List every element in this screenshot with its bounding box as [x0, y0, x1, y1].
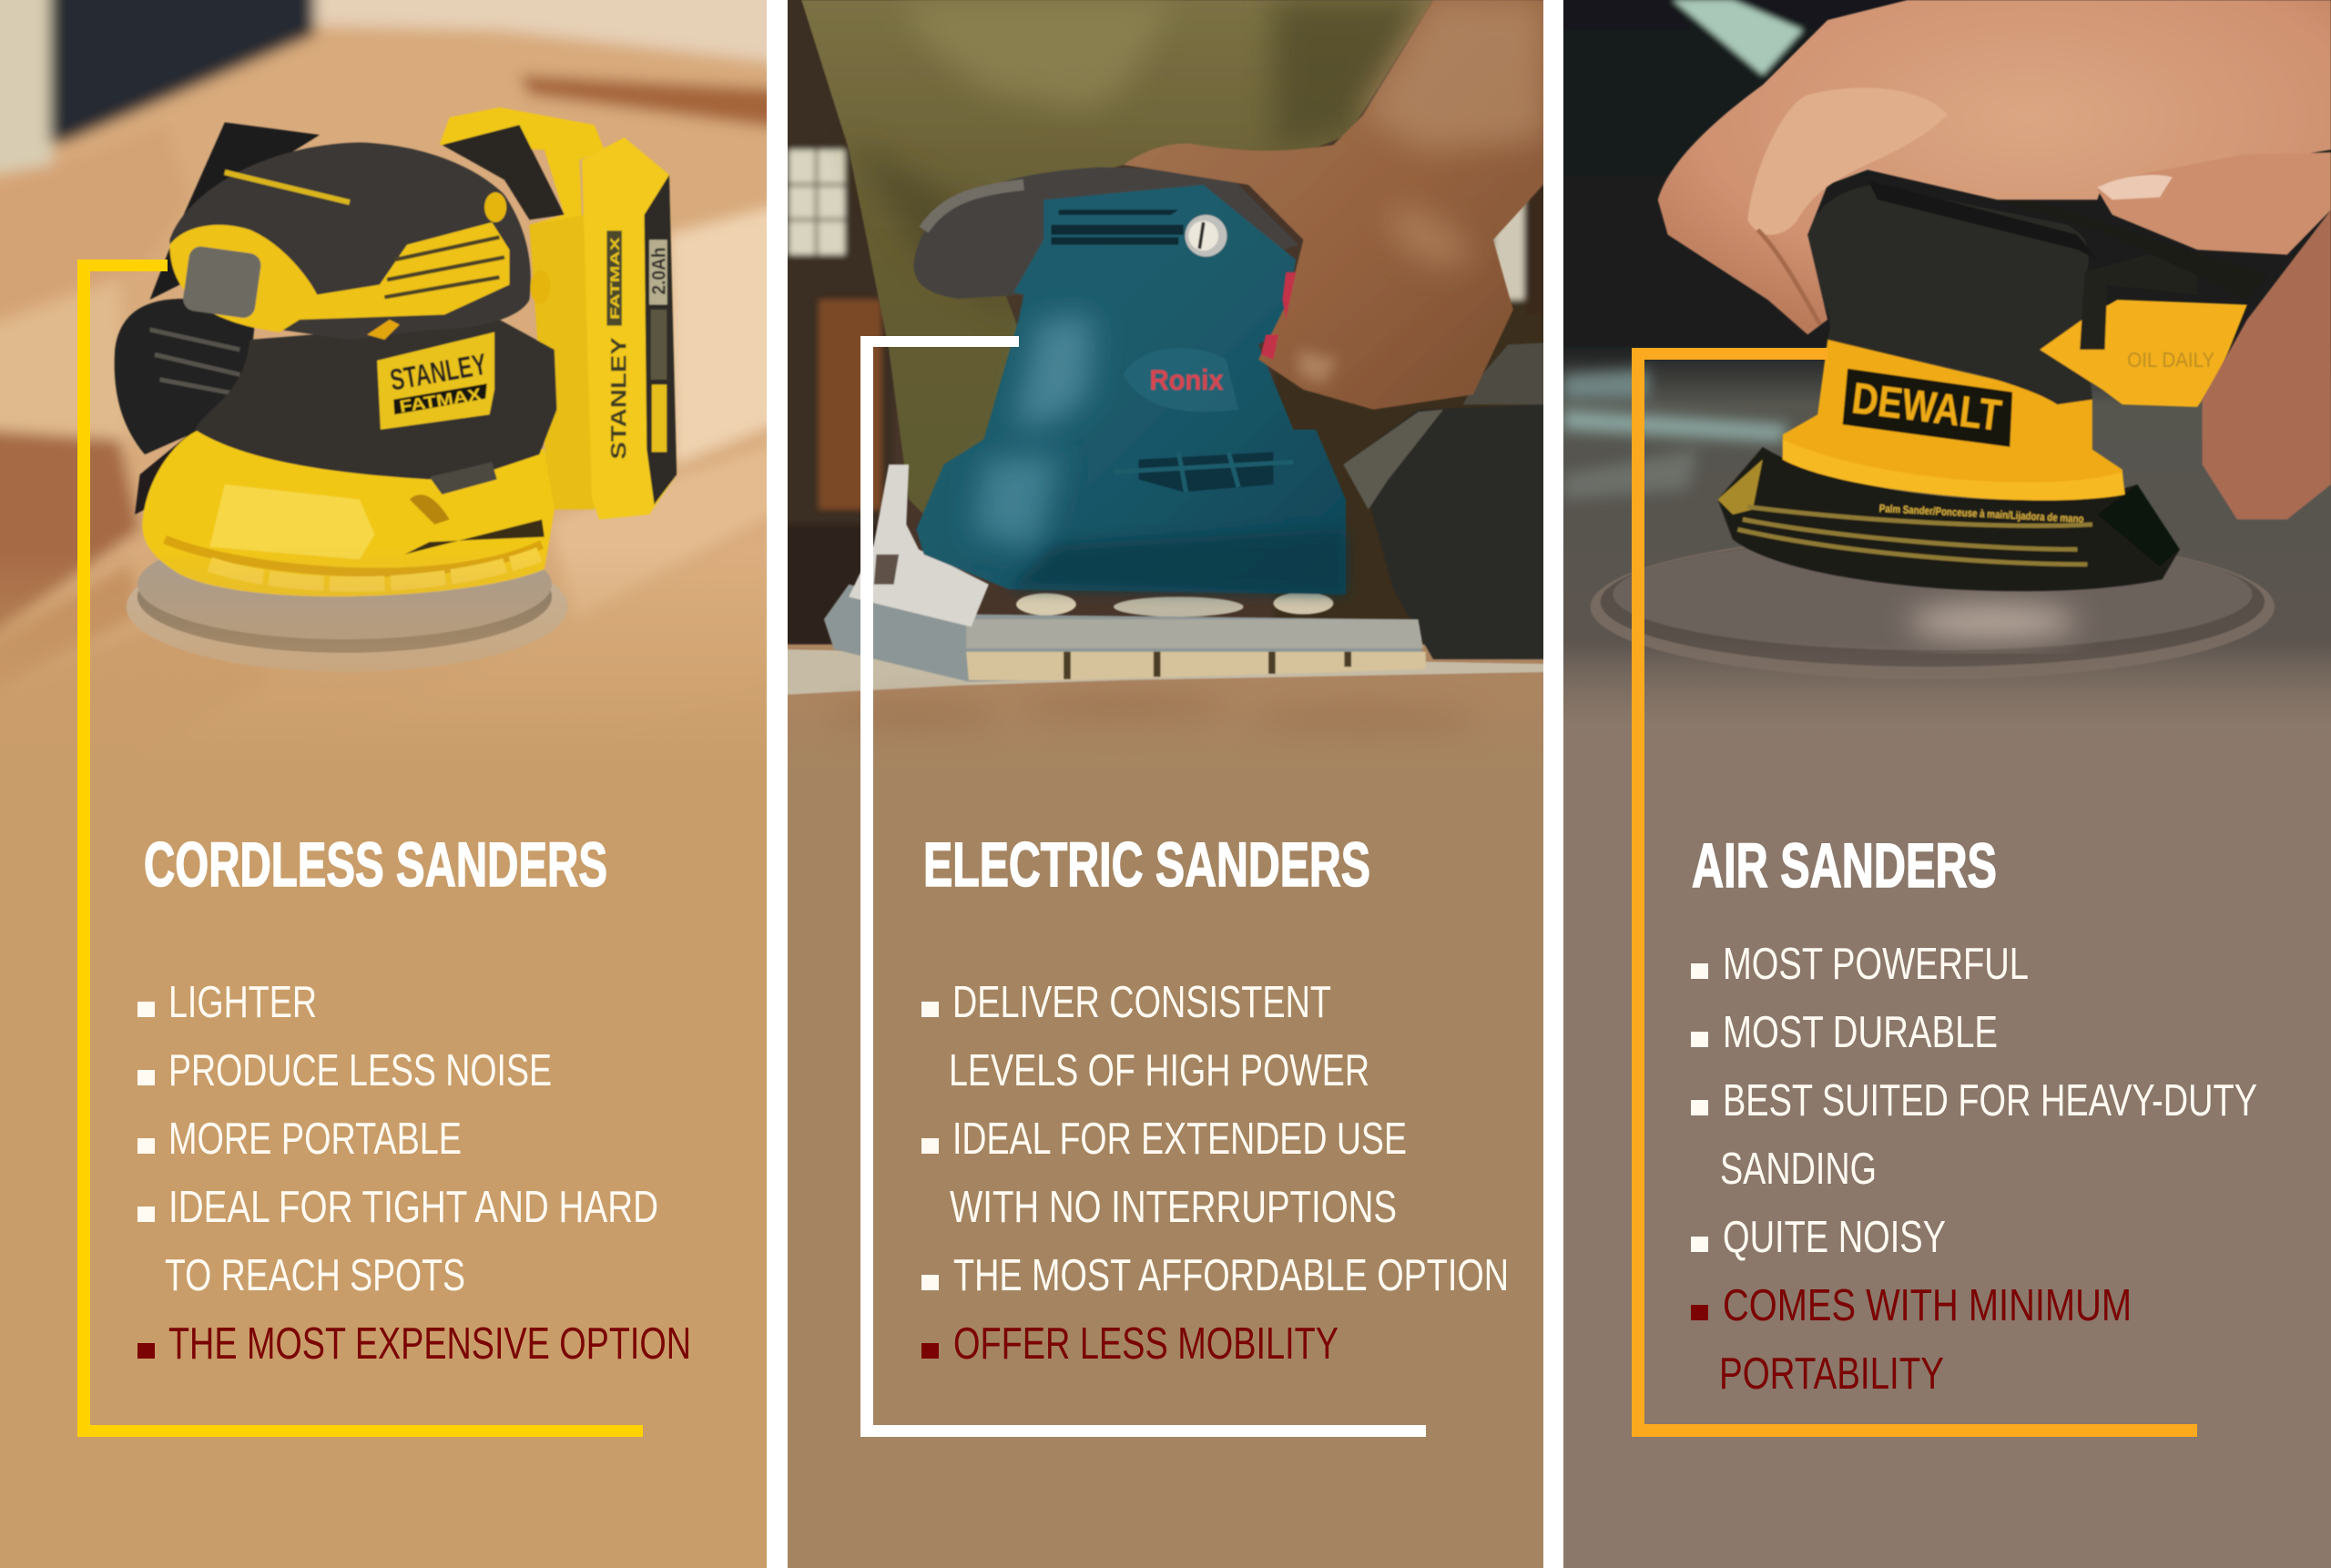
cloth	[1343, 342, 1557, 659]
photo: ronix sander in workshop	[754, 0, 1573, 820]
sander	[824, 168, 1426, 682]
bullet list: electric	[921, 978, 1509, 1369]
bullet list: electric: WITH NO INTERRUPTIONS	[950, 1183, 1397, 1232]
vent clip	[430, 462, 497, 494]
bullet list: air: QUITE NOISY	[1723, 1213, 1946, 1262]
workbench floor	[774, 645, 1557, 820]
photo: dewalt palm sander held by hands	[1528, 0, 2331, 830]
yellow trigger arm	[2040, 300, 2247, 407]
frame: air orange bracket	[1632, 348, 2197, 1437]
yellow front nose and grille	[169, 222, 509, 332]
label: dewalt: DEWALT	[1849, 373, 2004, 441]
workshop background	[754, 0, 1573, 699]
bullet list: cordless: PRODUCE LESS NOISE	[168, 1046, 552, 1095]
bullet list: cordless: LIGHTER	[168, 978, 317, 1027]
olive shirt	[801, 0, 1433, 514]
feet	[1016, 594, 1076, 616]
vents top	[1051, 209, 1184, 245]
shirt dark folds	[849, 0, 1433, 325]
bullet list: electric: OFFER LESS MOBILITY	[953, 1319, 1339, 1369]
bullet list: air: MOST POWERFUL	[1723, 940, 2029, 989]
content: air sanders	[1691, 830, 2257, 1399]
fade to grey brown	[1563, 637, 2331, 874]
base plate	[824, 585, 1426, 682]
label: ronix: Ronix	[1149, 363, 1224, 396]
highlight base	[973, 454, 1059, 549]
dewalt logo	[1843, 369, 2012, 447]
dark handle	[1807, 185, 2092, 404]
yellow neck	[1783, 340, 2125, 500]
bullet list: electric: IDEAL FOR EXTENDED USE	[952, 1115, 1407, 1164]
label: palm sander: Palm Sander/Ponceuse à main/Lijadora de mano	[1878, 502, 2084, 525]
power button	[181, 245, 262, 320]
bullet list: air	[1691, 940, 2257, 1399]
label: stanley on badge: STANLEY	[387, 347, 489, 397]
bullet list: air: MOST DURABLE	[1723, 1008, 1998, 1057]
bullet list: air: PORTABILITY	[1719, 1349, 1944, 1399]
fade to brown	[788, 706, 1543, 874]
label: oil daily: OIL DAILY	[2127, 348, 2214, 372]
panel: air sanders	[1528, 0, 2331, 1568]
label: stanley on battery: STANLEY	[606, 337, 631, 460]
frame: electric white bracket	[860, 336, 1426, 1437]
yellow base	[142, 430, 555, 596]
vents bottom	[1138, 452, 1273, 492]
bullet list: electric: DELIVER CONSISTENT	[952, 978, 1331, 1027]
bullet list: electric: LEVELS OF HIGH POWER	[949, 1046, 1369, 1095]
bullet list: electric: THE MOST AFFORDABLE OPTION	[953, 1251, 1509, 1300]
sanding disc	[1591, 535, 2275, 679]
panel: electric sanders	[754, 0, 1573, 1568]
bullet list: air: SANDING	[1720, 1145, 1877, 1194]
surface streaks	[1562, 370, 1787, 500]
frame: cordless yellow bracket	[77, 260, 643, 1437]
floor grain	[829, 694, 1478, 742]
pad	[127, 542, 568, 672]
bullet list: cordless: MORE PORTABLE	[168, 1115, 462, 1164]
sander	[1717, 179, 2267, 591]
black base	[1717, 447, 2180, 591]
badge	[377, 332, 494, 430]
sander body	[115, 107, 677, 672]
metal clip	[849, 464, 989, 626]
battery	[582, 137, 677, 519]
dark background and surface	[1528, 0, 2331, 830]
disc highlight	[1908, 606, 2077, 637]
bullet list: air: COMES WITH MINIMUM	[1723, 1281, 2132, 1330]
logo plate	[1124, 348, 1238, 412]
bullet list: cordless: TO REACH SPOTS	[165, 1251, 465, 1300]
panel background: grey brown	[1563, 0, 2331, 1568]
battery holder	[439, 107, 605, 225]
hose	[115, 299, 255, 454]
bullet list: cordless	[137, 978, 691, 1369]
bullet list: cordless: IDEAL FOR TIGHT AND HARD	[168, 1183, 658, 1232]
highlight neck	[1013, 315, 1094, 430]
fade to tan	[0, 546, 767, 874]
teal body	[916, 185, 1346, 595]
label: 2.0 on battery: 2.0Ah	[649, 248, 670, 295]
photo: stanley sander on wood plank	[0, 0, 767, 685]
label: fatmax on battery: FATMAX	[608, 237, 623, 320]
panel: cordless sanders	[0, 0, 799, 1568]
shirt light patch	[904, 0, 1174, 110]
grip	[914, 168, 1298, 299]
panel background: brown	[788, 0, 1543, 1568]
wood background	[0, 0, 767, 685]
body	[195, 320, 557, 480]
knob	[1185, 215, 1227, 257]
hand and arm	[1124, 0, 1557, 410]
heading: cordless sanders: CORDLESS SANDERS	[144, 830, 607, 900]
heading: electric sanders: ELECTRIC SANDERS	[923, 830, 1370, 900]
label: fatmax on badge: FATMAX	[398, 384, 484, 416]
handle	[169, 142, 531, 340]
hood shade	[1009, 529, 1346, 595]
heading: air sanders: AIR SANDERS	[1692, 830, 1997, 901]
lever	[2080, 255, 2197, 350]
bullet list: cordless: THE MOST EXPENSIVE OPTION	[168, 1319, 691, 1369]
panel background: tan	[0, 874, 767, 1568]
content: electric sanders	[921, 830, 1509, 1369]
content: cordless sanders	[137, 830, 691, 1369]
hands	[1658, 0, 2331, 519]
